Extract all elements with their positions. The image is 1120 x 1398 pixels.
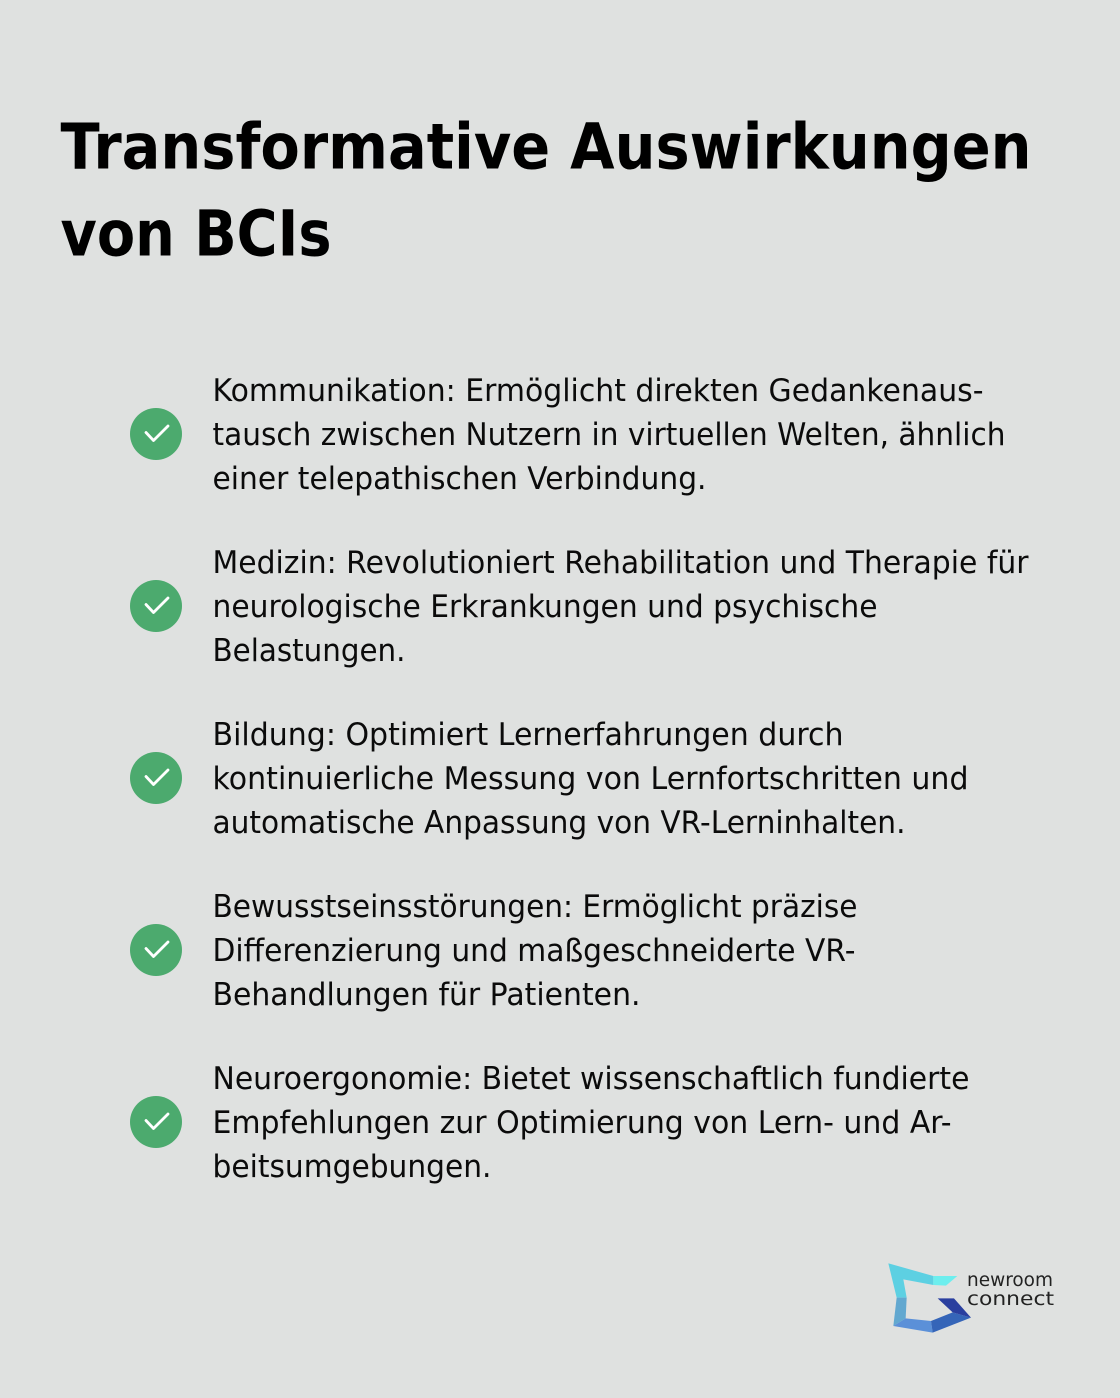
text: Neuroergonomie: Neuroergonomie: Bietet wissenschaftlich fundierte (212, 1061, 970, 1097)
text: Medizin: Belastungen. (212, 633, 406, 669)
logo: newroom connect (888, 1263, 1054, 1333)
text: Neuroergonomie: Empfehlungen zur Optimierung von Lern- und Ar- (212, 1105, 952, 1141)
icon: green check circle (130, 1096, 182, 1148)
text: Bildung: Bildung: Optimiert Lernerfahrungen durch (212, 717, 844, 753)
icon: green check circle (130, 924, 182, 976)
list item: Bewusstseinsstörungen (130, 889, 858, 1013)
text: Bewusstseinsstörungen (212, 889, 858, 1013)
text: Bildung (212, 717, 968, 841)
text: Bewusstseinsstörungen: Bewusstseinsstörungen: Ermöglicht präzise (212, 889, 858, 925)
icon: green check circle (130, 580, 182, 632)
logo wordmark: newroom (967, 1270, 1053, 1291)
text: Bildung: automatische Anpassung von VR-Lerninhalten. (212, 805, 906, 841)
text: Neuroergonomie: beitsumgebungen. (212, 1149, 492, 1185)
icon: logo mark (888, 1263, 971, 1333)
title: von BCIs (60, 198, 332, 270)
list item: Bildung (130, 717, 968, 841)
title (60, 110, 1032, 270)
list item: Medizin (130, 545, 1029, 669)
logo wordmark: connect (967, 1289, 1054, 1310)
list item: Neuroergonomie (130, 1061, 970, 1185)
text: Kommunikation: tausch zwischen Nutzern in virtuellen Welten, ähnlich (212, 417, 1006, 453)
text: Bildung: kontinuierliche Messung von Lernfortschritten und (212, 761, 968, 797)
text: Kommunikation: einer telepathischen Verbindung. (212, 461, 706, 497)
text: Kommunikation: Kommunikation: Ermöglicht direkten Gedankenaus- (212, 373, 984, 409)
text: Medizin: neurologische Erkrankungen und psychische (212, 589, 878, 625)
text: Bewusstseinsstörungen: Differenzierung und maßgeschneiderte VR- (212, 933, 856, 969)
text: Medizin (212, 545, 1029, 669)
title: Transformative Auswirkungen (60, 110, 1032, 184)
text: Neuroergonomie (212, 1061, 970, 1185)
icon: green check circle (130, 408, 182, 460)
logo wordmark (967, 1270, 1054, 1310)
list item: Kommunikation (130, 373, 1006, 497)
text: Kommunikation (212, 373, 1006, 497)
icon: green check circle (130, 752, 182, 804)
text: Medizin: Medizin: Revolutioniert Rehabilitation und Therapie für (212, 545, 1029, 581)
text: Bewusstseinsstörungen: Behandlungen für Patienten. (212, 977, 640, 1013)
